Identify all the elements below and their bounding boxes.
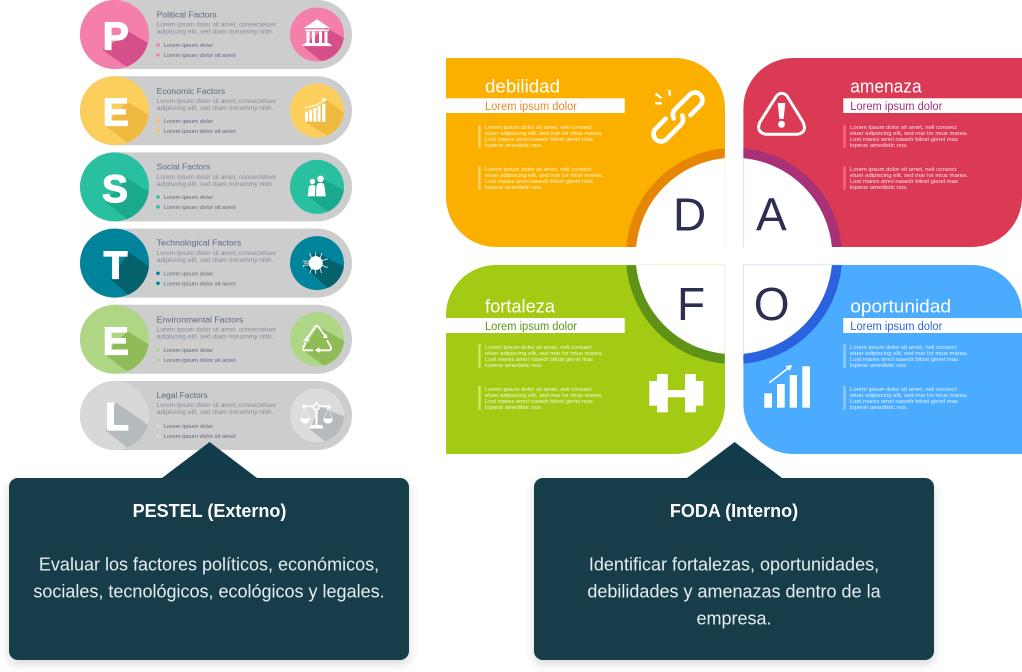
icon: dumbbell bbox=[649, 374, 703, 412]
text block 2: etuer adipiscing elit, sed mar lor mius marea. bbox=[485, 173, 603, 179]
heading: Political Factors: Political Factors bbox=[157, 10, 217, 20]
subheading bar bbox=[446, 318, 625, 333]
text block: debilidades y amenazas dentro de la bbox=[587, 582, 882, 602]
text block: adipiscing elit, sed diam nonummy nibh. bbox=[157, 334, 274, 340]
text block: adipiscing elit, sed diam nonummy nibh. bbox=[157, 258, 274, 264]
bullet list: Lorem ipsum dolor bbox=[164, 43, 213, 49]
text block: Identificar fortalezas, oportunidades, bbox=[589, 554, 879, 574]
text block 2: loperar amedistic nos. bbox=[850, 185, 908, 191]
letter A: A bbox=[756, 188, 787, 240]
icon: broken link bbox=[650, 89, 706, 145]
text block 2 bbox=[843, 386, 968, 411]
heading: Legal Factors: Legal Factors bbox=[157, 391, 208, 400]
text block 1: loperar amedistic nos. bbox=[850, 363, 908, 369]
heading: amenaza: amenaza bbox=[850, 77, 923, 97]
letter E: E bbox=[103, 320, 129, 363]
bullet list bbox=[156, 271, 236, 287]
text block 1 bbox=[478, 125, 603, 149]
bullet list bbox=[156, 195, 236, 211]
bullet list: Lorem ipsum dolor bbox=[164, 424, 213, 430]
text block bbox=[157, 327, 276, 340]
text block 1 bbox=[843, 344, 968, 369]
text block 1: Lost mares amol nasedr bilost gierel mas bbox=[485, 137, 593, 143]
letter T: T bbox=[104, 245, 128, 288]
text block 1: loperar amedistic nos. bbox=[850, 143, 908, 149]
callout: FODA bbox=[534, 442, 934, 660]
icon: bar chart with arrow bbox=[764, 365, 810, 408]
bullet list bbox=[156, 43, 236, 59]
letter D: D bbox=[673, 188, 706, 240]
text block: adipiscing elit, sed diam nonummy nibh. bbox=[157, 410, 274, 416]
text block bbox=[157, 23, 276, 36]
bullet list: Lorem ipsum dolor sit amet bbox=[164, 358, 236, 364]
text block: Lorem ipsum dolor sit amet, consectetuer bbox=[157, 251, 276, 257]
text block bbox=[157, 251, 276, 264]
text block 2: Lorem ipsum dolor sit amet, neli consect bbox=[850, 387, 957, 393]
panel: debilidad bbox=[446, 58, 726, 247]
icon: people bbox=[308, 176, 326, 196]
text block bbox=[587, 554, 882, 628]
text block 2: Lorem ipsum dolor sit amet, neli consect bbox=[485, 387, 592, 393]
subheading bar: Lorem ipsum dolor bbox=[485, 321, 577, 333]
heading: PESTEL (Externo): PESTEL (Externo) bbox=[133, 501, 286, 521]
panel: Economic Factors bbox=[80, 76, 352, 146]
heading: oportunidad: oportunidad bbox=[850, 296, 951, 316]
bullet list: Lorem ipsum dolor sit amet bbox=[164, 53, 236, 59]
text block 2: Lost mares amol nasedr bilost gierel mas bbox=[850, 399, 958, 405]
icon: warning bbox=[759, 93, 804, 134]
text block 2: Lorem ipsum dolor sit amet, neli consect bbox=[850, 167, 957, 173]
letter P: P bbox=[103, 15, 129, 58]
text block 2: Lost mares amol nasedr bilost gierel mas bbox=[485, 179, 593, 185]
text block bbox=[33, 554, 385, 602]
text block 1: Lorem ipsum dolor sit amet, neli consect bbox=[485, 125, 592, 131]
icon: recycle triangle bbox=[303, 326, 331, 353]
letter L: L bbox=[105, 396, 129, 439]
text block 2: loperar amedistic nos. bbox=[485, 185, 543, 191]
bullet list: Lorem ipsum dolor sit amet bbox=[164, 434, 236, 440]
text block 1 bbox=[843, 125, 968, 149]
text block 2: Lost mares amol nasedr bilost gierel mas bbox=[485, 399, 593, 405]
text block 2: Lorem ipsum dolor sit amet, neli consect bbox=[485, 167, 592, 173]
callout: PESTEL bbox=[9, 442, 409, 660]
text block 1: loperar amedistic nos. bbox=[485, 363, 543, 369]
letter S: S bbox=[102, 168, 128, 211]
text block 1: etuer adipiscing elit, sed mar lor mius marea. bbox=[850, 351, 968, 357]
letter E: E bbox=[103, 91, 129, 134]
icon: growth chart bbox=[305, 98, 326, 122]
bullet list: Lorem ipsum dolor sit amet bbox=[164, 205, 236, 211]
panel: Technological Factors bbox=[80, 228, 352, 298]
text block 1: loperar amedistic nos. bbox=[485, 143, 543, 149]
subheading bar: Lorem ipsum dolor bbox=[850, 321, 942, 333]
text block 2 bbox=[478, 386, 603, 411]
text block: adipiscing elit, sed diam nonummy nibh. bbox=[157, 30, 274, 36]
text block 2: etuer adipiscing elit, sed mar lor mius marea. bbox=[850, 393, 968, 399]
text block: sociales, tecnológicos, ecológicos y legales. bbox=[33, 582, 385, 602]
text block 1 bbox=[478, 344, 603, 369]
text block 1: Lost mares amol nasedr bilost gierel mas bbox=[485, 357, 593, 363]
text block 2: loperar amedistic nos. bbox=[485, 405, 543, 411]
text block: Evaluar los factores políticos, económicos, bbox=[39, 554, 379, 574]
text block 1: Lorem ipsum dolor sit amet, neli consect bbox=[850, 125, 957, 131]
heading: Technological Factors: Technological Factors bbox=[157, 239, 241, 248]
subheading bar: Lorem ipsum dolor bbox=[850, 101, 942, 113]
bullet list: Lorem ipsum dolor bbox=[164, 348, 213, 354]
panel: Social Factors bbox=[80, 152, 352, 222]
subheading bar: Lorem ipsum dolor bbox=[485, 101, 577, 113]
bullet list: Lorem ipsum dolor sit amet bbox=[164, 281, 236, 287]
text block 1: etuer adipiscing elit, sed mar lor mius marea. bbox=[850, 131, 968, 137]
text block: adipiscing elit, sed diam nonummy nibh. bbox=[157, 182, 274, 188]
icon: bank bbox=[302, 19, 332, 46]
heading: Social Factors: Social Factors bbox=[157, 163, 210, 172]
text block: Lorem ipsum dolor sit amet, consectetuer bbox=[157, 23, 276, 29]
bullet list: Lorem ipsum dolor sit amet bbox=[164, 129, 236, 135]
text block 1: etuer adipiscing elit, sed mar lor mius marea. bbox=[485, 351, 603, 357]
heading: FODA (Interno): FODA (Interno) bbox=[670, 501, 798, 521]
letter F: F bbox=[677, 278, 705, 330]
text block: Lorem ipsum dolor sit amet, consectetuer bbox=[157, 99, 276, 105]
bullet list: Lorem ipsum dolor bbox=[164, 271, 213, 277]
text block bbox=[157, 403, 276, 416]
bullet list bbox=[156, 348, 236, 364]
text block 1: Lorem ipsum dolor sit amet, neli consect bbox=[850, 345, 957, 351]
text block: Lorem ipsum dolor sit amet, consectetuer bbox=[157, 327, 276, 333]
subheading bar bbox=[843, 318, 1022, 333]
heading: fortaleza: fortaleza bbox=[485, 296, 556, 316]
text block 2: Lost mares amol nasedr bilost gierel mas bbox=[850, 179, 958, 185]
panel: fortaleza bbox=[446, 264, 726, 454]
panel: Legal Factors bbox=[80, 381, 352, 450]
bullet list: Lorem ipsum dolor bbox=[164, 195, 213, 201]
text block 2 bbox=[843, 166, 968, 191]
text block: Lorem ipsum dolor sit amet, consectetuer bbox=[157, 175, 276, 181]
text block 1: etuer adipiscing elit, sed mar lor mius marea. bbox=[485, 131, 603, 137]
subheading bar bbox=[446, 98, 625, 113]
text block bbox=[157, 175, 276, 188]
text block: Lorem ipsum dolor sit amet, consectetuer bbox=[157, 403, 276, 409]
text block 2: etuer adipiscing elit, sed mar lor mius marea. bbox=[485, 393, 603, 399]
bullet list: Lorem ipsum dolor bbox=[164, 119, 213, 125]
icon: scales bbox=[300, 402, 333, 428]
text block 2: etuer adipiscing elit, sed mar lor mius marea. bbox=[850, 173, 968, 179]
text block bbox=[157, 99, 276, 112]
text block 1: Lost mares amol nasedr bilost gierel mas bbox=[850, 357, 958, 363]
text block 2 bbox=[478, 166, 603, 191]
panel: Environmental Factors bbox=[80, 304, 352, 374]
heading: debilidad: debilidad bbox=[485, 77, 560, 97]
text block 1: Lorem ipsum dolor sit amet, neli consect bbox=[485, 345, 592, 351]
panel: Political Factors bbox=[80, 0, 352, 69]
heading: Economic Factors: Economic Factors bbox=[157, 87, 225, 96]
letter O: O bbox=[754, 278, 789, 330]
panel: amenaza bbox=[743, 58, 1022, 247]
panel: oportunidad bbox=[743, 264, 1022, 454]
subheading bar bbox=[843, 98, 1022, 113]
bullet list bbox=[156, 424, 236, 440]
text block: adipiscing elit, sed diam nonummy nibh. bbox=[157, 106, 274, 112]
bullet list bbox=[156, 119, 236, 135]
heading: Environmental Factors: Environmental Factors bbox=[157, 315, 243, 324]
icon: circuit sun bbox=[303, 252, 328, 274]
text block: empresa. bbox=[696, 608, 772, 628]
text block 1: Lost mares amol nasedr bilost gierel mas bbox=[850, 137, 958, 143]
text block 2: loperar amedistic nos. bbox=[850, 405, 908, 411]
